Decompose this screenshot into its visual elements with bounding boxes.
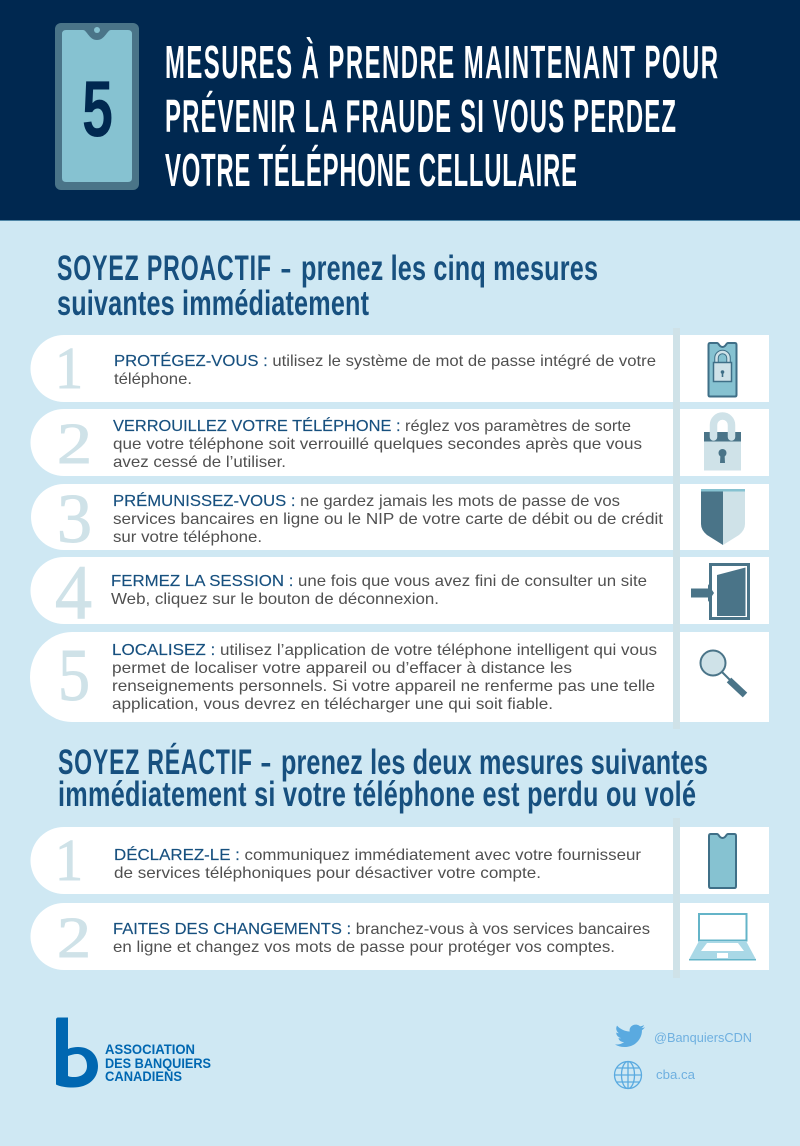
icon: globe (614, 1062, 642, 1088)
panel: reactive steps (30, 827, 769, 970)
heading: reactive: SOYEZ RÉACTIF (58, 742, 252, 782)
step 1: PROTÉGEZ-VOUS : utilisez le système de mot de passe intégré de votre (114, 351, 656, 370)
heading: reactive: prenez les deux mesures suivantes (281, 743, 708, 782)
title: VOTRE TÉLÉPHONE CELLULAIRE (165, 145, 577, 196)
step 1 (30, 335, 769, 402)
step 5: renseignements personnels. Si votre appareil ne renferme pas une telle (112, 678, 655, 695)
step 2: avez cessé de l’utiliser. (113, 454, 286, 471)
icon: phone (709, 834, 736, 888)
icon: phone with number 5: 5 (82, 64, 113, 153)
twitter handle (615, 1025, 752, 1047)
step 4: Web, cliquez sur le bouton de déconnexion. (111, 591, 439, 608)
step 5: permet de localiser votre appareil ou d’effacer à distance les (112, 660, 572, 677)
reactive step 2 (30, 903, 769, 970)
icon: shield (701, 489, 745, 545)
step 4 (30, 549, 769, 635)
twitter handle: @BanquiersCDN (654, 1030, 752, 1045)
logo: Association des banquiers canadiens (56, 1018, 211, 1088)
step 4: 4 (55, 549, 92, 635)
logo: Association des banquiers canadiens: DES BANQUIERS (105, 1056, 211, 1071)
icon: door with arrow (691, 564, 748, 618)
step 5 (30, 632, 769, 722)
panel: proactive steps (30, 335, 769, 722)
header banner (0, 0, 800, 221)
icon: phone with padlock (708, 343, 736, 396)
step 2: 2 (57, 411, 92, 476)
step 3: PRÉMUNISSEZ-VOUS : ne gardez jamais les mots de passe de vos (113, 491, 620, 510)
icon: laptop (689, 914, 756, 960)
logo: Association des banquiers canadiens: ASSOCIATION (105, 1042, 195, 1057)
website: cba.ca (656, 1067, 696, 1082)
heading: proactive: suivantes immédiatement (57, 284, 369, 323)
reactive step 1: DÉCLAREZ-LE : communiquez immédiatement avec votre fournisseur (114, 845, 642, 864)
step 3: 3 (57, 481, 92, 558)
icon: phone with number 5 (55, 23, 139, 190)
step 4: FERMEZ LA SESSION : une fois que vous avez fini de consulter un site (111, 573, 647, 590)
reactive step 2: 2 (57, 905, 91, 970)
step 1: 1 (55, 335, 83, 401)
icon: twitter bird (615, 1025, 645, 1047)
website (614, 1062, 696, 1088)
step 3 (31, 481, 769, 558)
title: PRÉVENIR LA FRAUDE SI VOUS PERDEZ (165, 91, 676, 142)
icon: padlock (704, 416, 741, 470)
step 5: LOCALISEZ : utilisez l’application de votre téléphone intelligent qui vous (112, 642, 657, 659)
step 2 (30, 409, 769, 476)
icon: magnifying glass (700, 650, 745, 695)
reactive step 1 (30, 827, 769, 894)
step 5: application, vous devrez en télécharger une qui soit fiable. (112, 696, 553, 713)
reactive step 2: en ligne et changez vos mots de passe pour protéger vos comptes. (113, 939, 615, 956)
reactive step 1: 1 (55, 827, 83, 893)
heading: proactive (57, 248, 598, 323)
step 2: que votre téléphone soit verrouillé quelques secondes après que vous (113, 436, 642, 453)
heading: proactive: – (281, 248, 291, 288)
reactive step 1: de services téléphoniques pour désactiver votre compte. (114, 865, 541, 882)
heading: reactive (58, 742, 708, 814)
step 2: VERROUILLEZ VOTRE TÉLÉPHONE : réglez vos paramètres de sorte (113, 416, 631, 435)
heading: reactive: immédiatement si votre téléphone est perdu ou volé (58, 775, 696, 814)
heading: proactive: prenez les cinq mesures (301, 249, 598, 288)
heading: reactive: – (261, 742, 271, 782)
title: MESURES À PRENDRE MAINTENANT POUR (165, 37, 718, 88)
step 5: 5 (58, 635, 90, 717)
title (165, 37, 718, 196)
step 3: sur votre téléphone. (113, 529, 262, 546)
step 1: téléphone. (114, 371, 192, 388)
reactive step 2: FAITES DES CHANGEMENTS : branchez-vous à vos services bancaires (113, 921, 650, 938)
logo: Association des banquiers canadiens: CANADIENS (105, 1069, 182, 1084)
heading: proactive: SOYEZ PROACTIF (57, 249, 271, 288)
step 3: services bancaires en ligne ou le NIP de votre carte de débit ou de crédit (113, 511, 664, 528)
